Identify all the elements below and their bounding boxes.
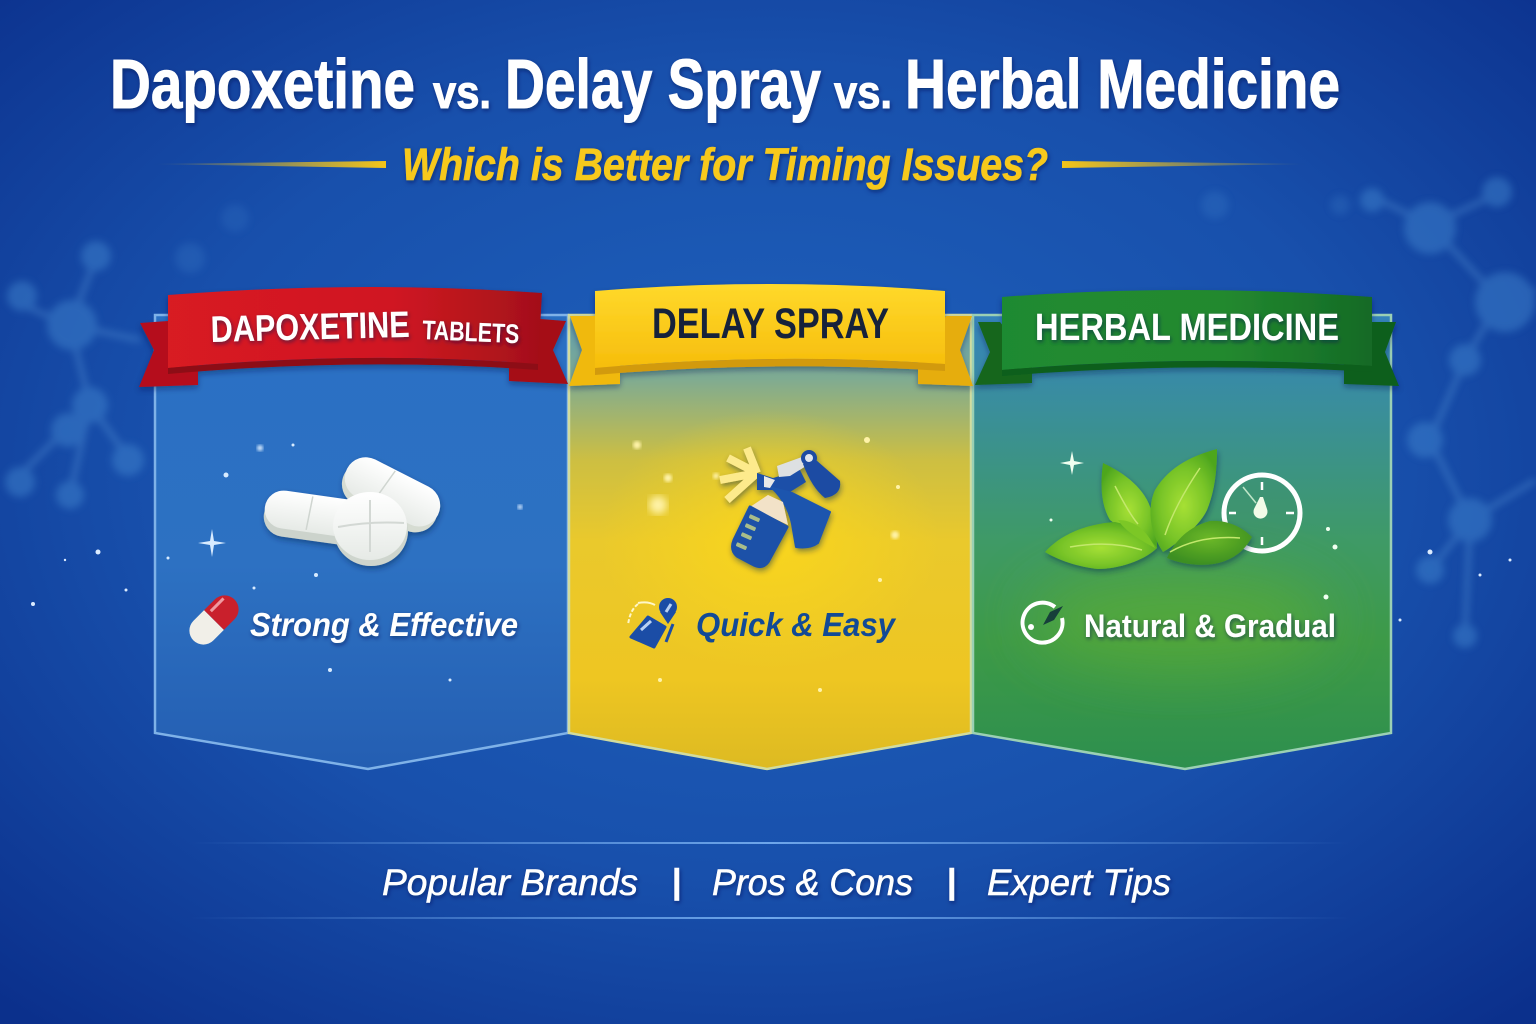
nozzle [757,470,806,492]
ribbon label: HERBAL MEDICINE [1035,307,1339,349]
small middle leaf [1118,520,1155,548]
round tablet [334,496,408,566]
yellow glow [600,410,940,670]
panel background [973,315,1391,769]
icon: white tablets [261,450,447,566]
title: vs. [433,66,491,118]
top left leaf [1101,463,1157,548]
panel tagline: Quick & Easy [696,606,897,643]
title: Dapoxetine [110,45,415,123]
footer links: Popular Brands [382,862,638,903]
panel tagline: Strong & Effective [250,606,518,643]
ribbon label: DAPOXETINE [210,304,410,350]
icon: small spray bottle [628,598,677,647]
lower right leaf [1167,521,1252,565]
title: vs. [834,66,892,118]
panel background [155,315,568,769]
subtitle with gold rules [150,139,1310,190]
icon: spray bottle [720,448,840,567]
molecule decoration right [1201,177,1536,648]
top right leaf [1150,449,1217,552]
ribbon label: DELAY SPRAY [652,300,889,348]
footer links: | [672,863,682,901]
spray burst [720,448,757,500]
bottle front [750,495,788,525]
panel: herbal medicine [973,315,1391,769]
panel background [569,315,971,769]
title: Herbal Medicine [905,45,1340,123]
bottle rear [772,488,830,548]
sparkles [633,437,900,692]
footer links: Pros & Cons [712,862,913,903]
footer rules [190,842,1350,919]
panel tagline: Natural & Gradual [1084,608,1336,644]
leaf veins [1070,468,1240,552]
upper capsule tablet [334,450,447,540]
trigger [801,450,817,466]
ribbon label: TABLETS [422,315,520,349]
sparkles [166,444,522,682]
title: Delay Spray [505,45,821,123]
footer links [382,862,1171,903]
lower left leaf [1045,522,1157,569]
left capsule tablet [261,488,371,548]
footer links: Expert Tips [987,862,1171,903]
icon: gauge clock [1224,475,1300,551]
panel: dapoxetine tablets [155,315,568,769]
ribbon: dapoxetine tablets [139,287,568,387]
sparkles [1050,451,1338,600]
ribbon: herbal medicine [975,290,1399,386]
icon: green leaves [1045,449,1252,569]
molecule decoration left [5,204,249,509]
icon: red and white capsule [184,590,244,650]
green glow [1030,570,1330,670]
ribbon: delay spray [569,284,973,386]
title [110,45,1340,123]
subtitle with gold rules: Which is Better for Timing Issues? [402,139,1048,190]
footer links: | [947,863,957,901]
panel: delay spray [569,315,971,769]
background sparkles [31,550,1512,622]
icon: small gauge [1023,603,1063,643]
